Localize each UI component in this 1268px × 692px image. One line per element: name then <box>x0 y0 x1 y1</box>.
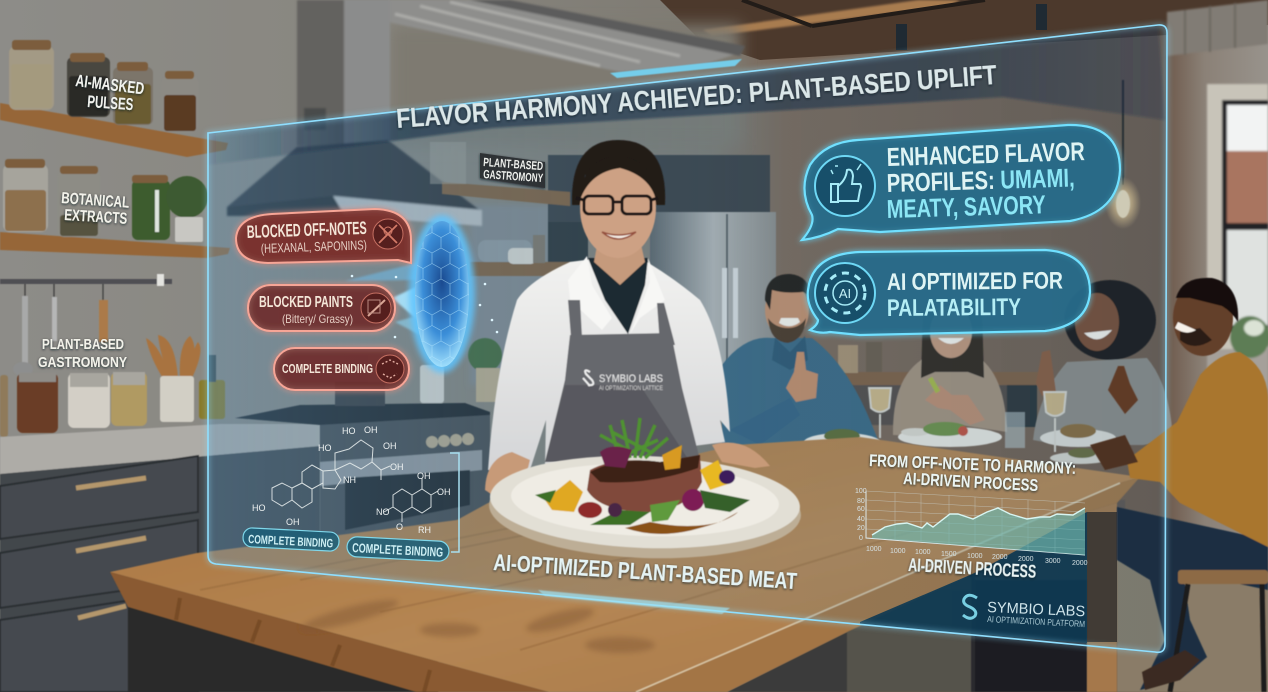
chemical structures: OH <box>383 441 396 451</box>
label: botanical extracts: BOTANICAL <box>61 190 130 212</box>
chemical structures: RH <box>418 525 431 535</box>
jars middle shelf <box>3 164 48 232</box>
icon: no bitter note <box>361 293 391 323</box>
chemical structures: HO <box>318 443 332 453</box>
line chart: 1000 <box>967 553 983 560</box>
floor by table leg <box>1117 560 1268 692</box>
tag: complete binding 2 <box>347 536 449 562</box>
line chart: 100 <box>855 488 867 495</box>
callout: enhanced flavor profiles: MEATY, SAVORY <box>886 189 1046 224</box>
line chart: 20 <box>857 525 865 532</box>
callout: blocked paints <box>248 285 395 331</box>
label: AI-masked pulses: PULSES <box>87 92 134 114</box>
dark shirt <box>588 258 648 334</box>
left counter and cabinets <box>0 424 320 692</box>
tag: complete binding 1 <box>243 528 339 551</box>
icon: thumbs up <box>815 156 875 216</box>
chemical structures: OH <box>417 471 430 481</box>
rays to membrane <box>345 262 420 335</box>
callout: blocked off-notes <box>236 209 411 263</box>
label: plant-based gastromony shelf: PLANT-BASED <box>483 155 544 173</box>
logo: Symbio Labs: AI OPTIMIZATION PLATFORM <box>987 614 1085 629</box>
line chart: 1500 <box>941 551 957 558</box>
line chart: 2000 <box>1072 560 1088 567</box>
lower cabinets under table <box>128 500 1125 692</box>
jar and shelf labels <box>38 71 545 371</box>
label: plant-based gastromony shelf <box>480 153 545 188</box>
callout: complete binding: COMPLETE BINDING <box>282 361 373 376</box>
hologram panel border <box>208 25 1167 652</box>
callout: complete binding <box>274 348 409 390</box>
apron logo <box>583 370 663 392</box>
table top <box>110 437 1140 692</box>
chart heading: FROM OFF-NOTE TO HARMONY: <box>869 451 1076 478</box>
refrigerator <box>650 212 776 382</box>
label: botanical extracts: EXTRACTS <box>64 207 128 228</box>
callout: blocked off-notes: BLOCKED OFF-NOTES <box>246 218 367 242</box>
chemical structures: HO <box>252 503 266 513</box>
neck <box>594 240 645 285</box>
table settings <box>804 388 1116 464</box>
diner: woman in beige sweater <box>893 306 1007 436</box>
callout: AI optimized for palatability <box>808 250 1090 335</box>
apron <box>545 333 700 462</box>
logo: Symbio Labs <box>963 595 1085 629</box>
line chart: 3000 <box>1045 558 1061 565</box>
diner: woman with curly hair <box>1033 280 1173 445</box>
chemical structures: HO <box>342 426 356 436</box>
caption: AI-optimized plant-based meat: AI-OPTIMIZED PLANT-BASED MEAT <box>493 549 798 594</box>
hologram glass tint <box>208 25 1167 652</box>
left wall shelves with jars <box>0 40 230 437</box>
line chart: 0 <box>859 535 863 542</box>
callout: enhanced flavor profiles <box>802 125 1120 240</box>
icon: AI gear <box>815 263 875 323</box>
upper shelves and cabinet <box>430 142 770 276</box>
main figure: scientist chef <box>485 140 770 500</box>
label: plant-based gastromony left: GASTROMONY <box>38 354 127 371</box>
label: plant-based gastromony shelf: GASTROMONY <box>483 167 544 185</box>
label: AI-masked pulses <box>75 71 145 114</box>
chemical structures: OH <box>286 517 300 527</box>
stove <box>235 338 502 560</box>
line chart: 60 <box>857 506 865 513</box>
chemical structures <box>252 425 459 552</box>
diner: man in mustard sweater <box>1090 278 1268 692</box>
line chart: 80 <box>857 498 865 505</box>
line chart: 1000 <box>890 548 906 555</box>
caption: AI-driven process: AI-DRIVEN PROCESS <box>908 555 1037 582</box>
chemical structures: OH <box>437 487 450 497</box>
smile <box>602 232 636 239</box>
window on right wall <box>1207 84 1268 389</box>
chemical structures: NO <box>376 507 390 517</box>
line chart <box>855 488 1088 567</box>
line chart: 1000 <box>866 546 882 553</box>
collars <box>568 256 612 330</box>
callout: AI optimized for palatability: AI OPTIMIZED FOR <box>887 267 1063 296</box>
logo: Symbio Labs: SYMBIO LABS <box>987 599 1085 620</box>
jars top shelf <box>9 46 54 110</box>
line chart: 40 <box>857 516 865 523</box>
apron logo: AI OPTIMIZATION LATTICE <box>599 386 663 392</box>
title: FLAVOR HARMONY ACHIEVED: PLANT-BASED UPLIFT <box>395 59 998 134</box>
callout: blocked paints: BLOCKED PAINTS <box>259 294 353 311</box>
callout: AI optimized for palatability: PALATABILITY <box>887 294 1021 322</box>
plate with plant-based steak <box>487 418 803 563</box>
label: plant-based gastromony left <box>38 336 127 371</box>
hair <box>572 140 665 205</box>
icon: AI gear: AI <box>839 286 851 301</box>
callout: blocked paints: (Bittery/ Grassy) <box>282 312 353 326</box>
icon: no off-notes <box>373 219 403 249</box>
back room shelf and pendant lamp <box>790 80 1141 427</box>
label: AI-masked pulses: AI-MASKED <box>75 71 145 98</box>
icon: molecule binding <box>376 355 404 383</box>
chart heading <box>869 451 1076 495</box>
chart heading: AI-DRIVEN PROCESS <box>903 469 1039 495</box>
label: botanical extracts <box>61 190 130 228</box>
apron logo: SYMBIO LABS <box>599 373 663 385</box>
chemical structures: OH <box>364 425 378 435</box>
chemical structures: NH <box>343 475 356 485</box>
white lab coat <box>488 258 730 470</box>
label: plant-based gastromony left: PLANT-BASED <box>42 336 124 353</box>
range hood <box>227 0 482 226</box>
jars lower counter <box>0 375 8 437</box>
callout: enhanced flavor profiles: ENHANCED FLAVOR <box>886 136 1085 172</box>
tag: complete binding 1: COMPLETE BINDING <box>248 532 333 550</box>
hanging rail and utensils <box>0 279 172 284</box>
diner: man in blue shirt <box>722 274 880 450</box>
line chart: 2000 <box>1018 556 1034 563</box>
callout: enhanced flavor profiles: PROFILES: UMAMI, <box>886 162 1075 198</box>
line chart: 2000 <box>992 554 1008 561</box>
chemical structures: OH <box>390 462 404 472</box>
callout: blocked off-notes: (HEXANAL, SAPONINS) <box>261 237 367 256</box>
line chart: 1000 <box>915 549 931 556</box>
blue barrier membrane with hexagons <box>351 215 498 373</box>
hands <box>485 452 530 500</box>
tag: complete binding 2: COMPLETE BINDING <box>352 540 444 560</box>
face <box>580 158 656 258</box>
glasses <box>576 196 658 214</box>
ceiling ducts <box>388 0 1268 72</box>
chemical structures: O <box>396 522 403 532</box>
